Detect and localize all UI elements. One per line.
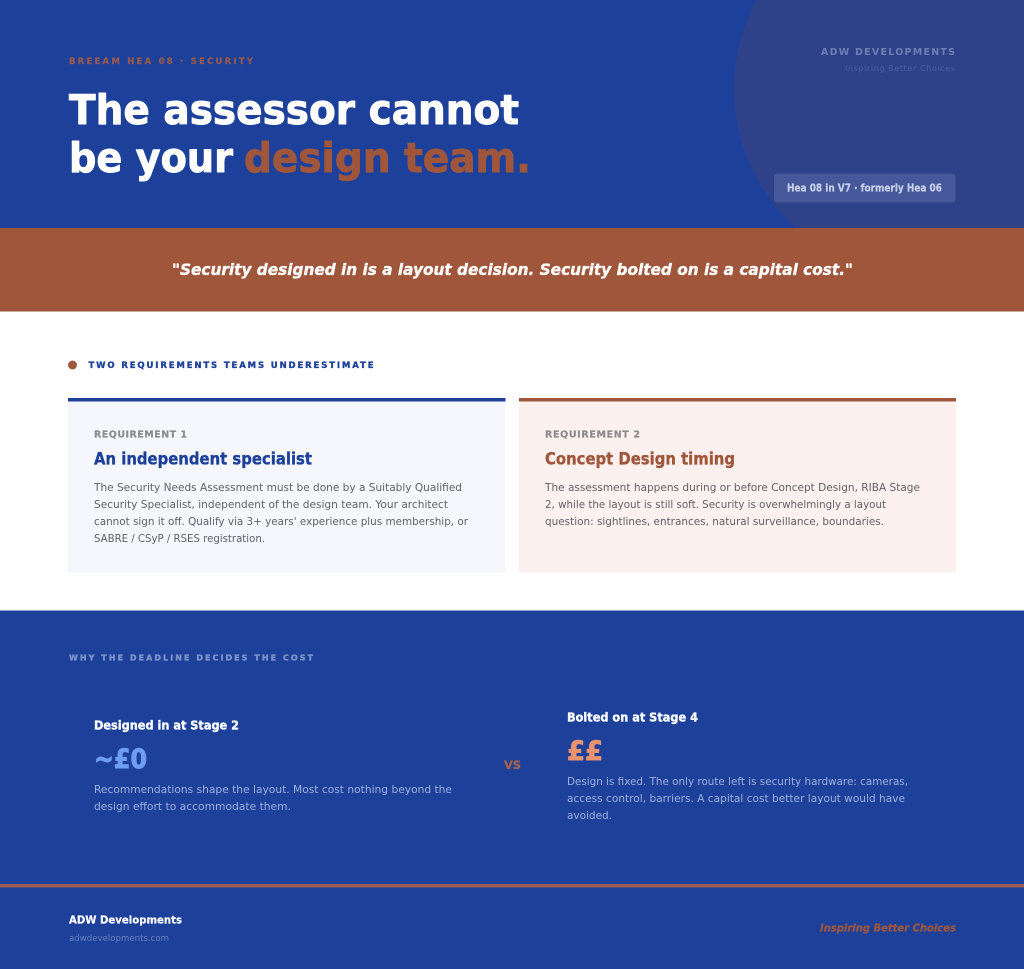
requirement 1 body: Security Specialist, independent of the design team. Your architect xyxy=(94,498,449,511)
requirement 1 body: cannot sign it off. Qualify via 3+ years' experience plus membership, or xyxy=(94,515,468,528)
panel: footer xyxy=(0,884,1024,944)
requirement 2 body: 2, while the layout is still soft. Security is overwhelmingly a layout xyxy=(545,498,887,511)
option: designed in: design effort to accommodate them. xyxy=(94,800,291,813)
eyebrow label: BREEAM HEA 08 · SECURITY xyxy=(69,57,254,67)
option: designed in xyxy=(94,718,452,813)
requirement 1 body: The Security Needs Assessment must be done by a Suitably Qualified xyxy=(93,481,462,494)
requirement 2 body: The assessment happens during or before Concept Design, RIBA Stage xyxy=(544,481,920,494)
title: The assessor cannot xyxy=(69,86,519,134)
panel: requirement 1 xyxy=(68,398,506,572)
cost: high: ££ xyxy=(567,736,603,767)
brand tagline: Inspiring Better Choices xyxy=(845,64,955,73)
title xyxy=(69,86,531,182)
option: bolted on xyxy=(567,710,908,822)
badge xyxy=(774,174,956,202)
option: bolted on: access control, barriers. A capital cost better layout would have xyxy=(567,792,905,805)
footer url: adwdevelopments.com xyxy=(69,934,169,944)
option: designed in: Designed in at Stage 2 xyxy=(94,718,239,732)
requirement 2 heading: Concept Design timing xyxy=(545,450,735,468)
versus marker: VS xyxy=(504,758,521,772)
option: designed in: Recommendations shape the layout. Most cost nothing beyond the xyxy=(94,783,452,796)
footer brand: ADW Developments xyxy=(69,914,182,926)
section heading: two requirements: TWO REQUIREMENTS TEAMS UNDERESTIMATE xyxy=(88,361,374,371)
panel: cost comparison xyxy=(0,610,1024,969)
requirement 2 body xyxy=(544,481,920,528)
requirement 2 label: REQUIREMENT 2 xyxy=(545,430,640,440)
decorative circle xyxy=(734,0,1024,276)
requirement 2 body: question: sightlines, entrances, natural surveillance, boundaries. xyxy=(545,515,884,528)
badge: Hea 08 in V7 · formerly Hea 06 xyxy=(787,182,942,194)
cost: about zero: ~£0 xyxy=(94,744,147,775)
requirement 1 label: REQUIREMENT 1 xyxy=(94,430,187,440)
quote banner: "Security designed in is a layout decision. Security bolted on is a capital cost." xyxy=(172,260,853,279)
requirement 1 heading: An independent specialist xyxy=(94,450,312,468)
title: design team. xyxy=(244,134,531,182)
section heading: deadline: WHY THE DEADLINE DECIDES THE COST xyxy=(69,654,314,662)
panel: header xyxy=(0,0,1024,276)
footer tagline: Inspiring Better Choices xyxy=(820,922,956,934)
title: be your xyxy=(69,134,234,182)
option: bolted on: Bolted on at Stage 4 xyxy=(567,710,698,724)
requirement 1 body: SABRE / CSyP / RSES registration. xyxy=(94,532,265,545)
brand name: ADW DEVELOPMENTS xyxy=(821,47,955,58)
quote banner xyxy=(0,228,1024,312)
requirement 1 body xyxy=(93,481,468,545)
option: bolted on: avoided. xyxy=(567,809,612,822)
option: bolted on: Design is fixed. The only route left is security hardware: cameras, xyxy=(567,775,908,788)
panel: requirement 2 xyxy=(519,398,956,572)
